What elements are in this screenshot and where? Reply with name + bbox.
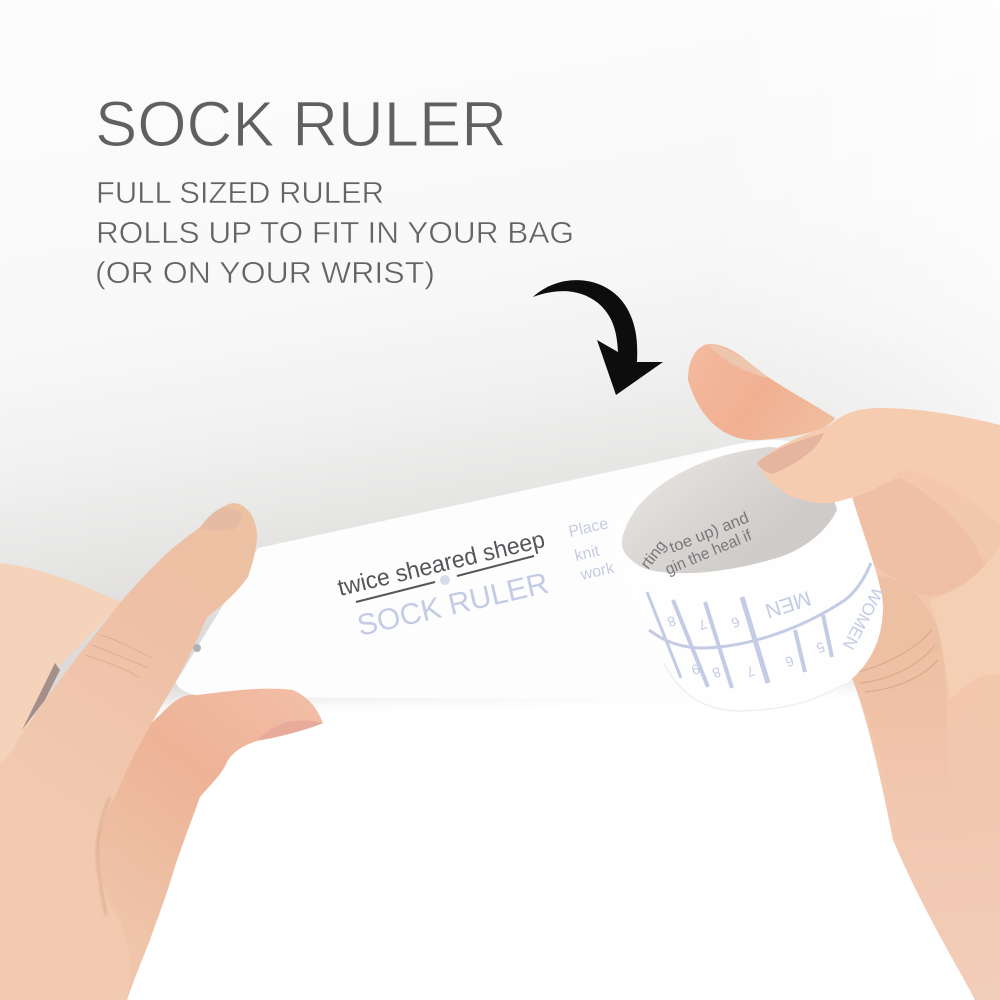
right hand: index finger [757, 408, 1000, 525]
left thumb nail [257, 721, 323, 740]
label: men: MEN [762, 586, 814, 622]
scale numbers: 7 [744, 663, 757, 681]
index nail [757, 433, 824, 474]
label: women: WOMEN [839, 585, 887, 653]
scale lines [647, 563, 871, 688]
left hand back fingers [0, 563, 122, 810]
scale numbers [665, 613, 827, 682]
scale numbers: 7 [696, 616, 709, 634]
instructions on strip: work [578, 560, 617, 584]
scale numbers: 6 [783, 653, 796, 671]
arrow [533, 280, 663, 395]
left thumb [60, 689, 323, 1000]
brand name: twice sheared sheep [335, 526, 548, 602]
subtitle text: (OR ON YOUR WRIST) [95, 255, 435, 290]
scale numbers: 8 [665, 613, 678, 631]
ruler strip [176, 441, 860, 700]
loop outer band [612, 440, 883, 711]
subtitle text: FULL SIZED RULER [96, 175, 384, 210]
scale numbers: 6 [729, 614, 742, 632]
product name: SOCK RULER [354, 567, 552, 643]
brand underline [356, 556, 534, 602]
scale numbers: 9 [689, 661, 702, 679]
subtitle text: ROLLS UP TO FIT IN YOUR BAG [96, 215, 574, 250]
left hand [0, 503, 323, 1000]
knuckle wrinkles [85, 635, 152, 678]
subtitle text [95, 175, 574, 290]
finger gap [22, 663, 60, 730]
loop bottom edge shading [664, 663, 847, 711]
instructions on strip [567, 515, 617, 584]
right hand: thumb [688, 344, 835, 440]
instructions on strip: Place [567, 515, 610, 541]
left hand main and index finger [0, 503, 257, 1000]
inner text: rting [638, 537, 670, 572]
rolled ruler loop [612, 440, 887, 711]
scale numbers: 5 [814, 639, 827, 657]
thumb nail [708, 344, 768, 378]
title: SOCK RULER [95, 88, 507, 160]
hand crease [97, 797, 110, 915]
loop inner [622, 447, 837, 573]
inner text: gin the heal if [663, 527, 755, 579]
inner text [638, 509, 755, 579]
inner text: toe up) and [667, 509, 751, 557]
left index nail [200, 507, 243, 531]
instructions on strip: knit [573, 543, 602, 565]
small logo [440, 575, 450, 585]
scale numbers: 8 [710, 664, 723, 682]
right hand: palm and fingers behind the loop [850, 425, 1000, 1000]
